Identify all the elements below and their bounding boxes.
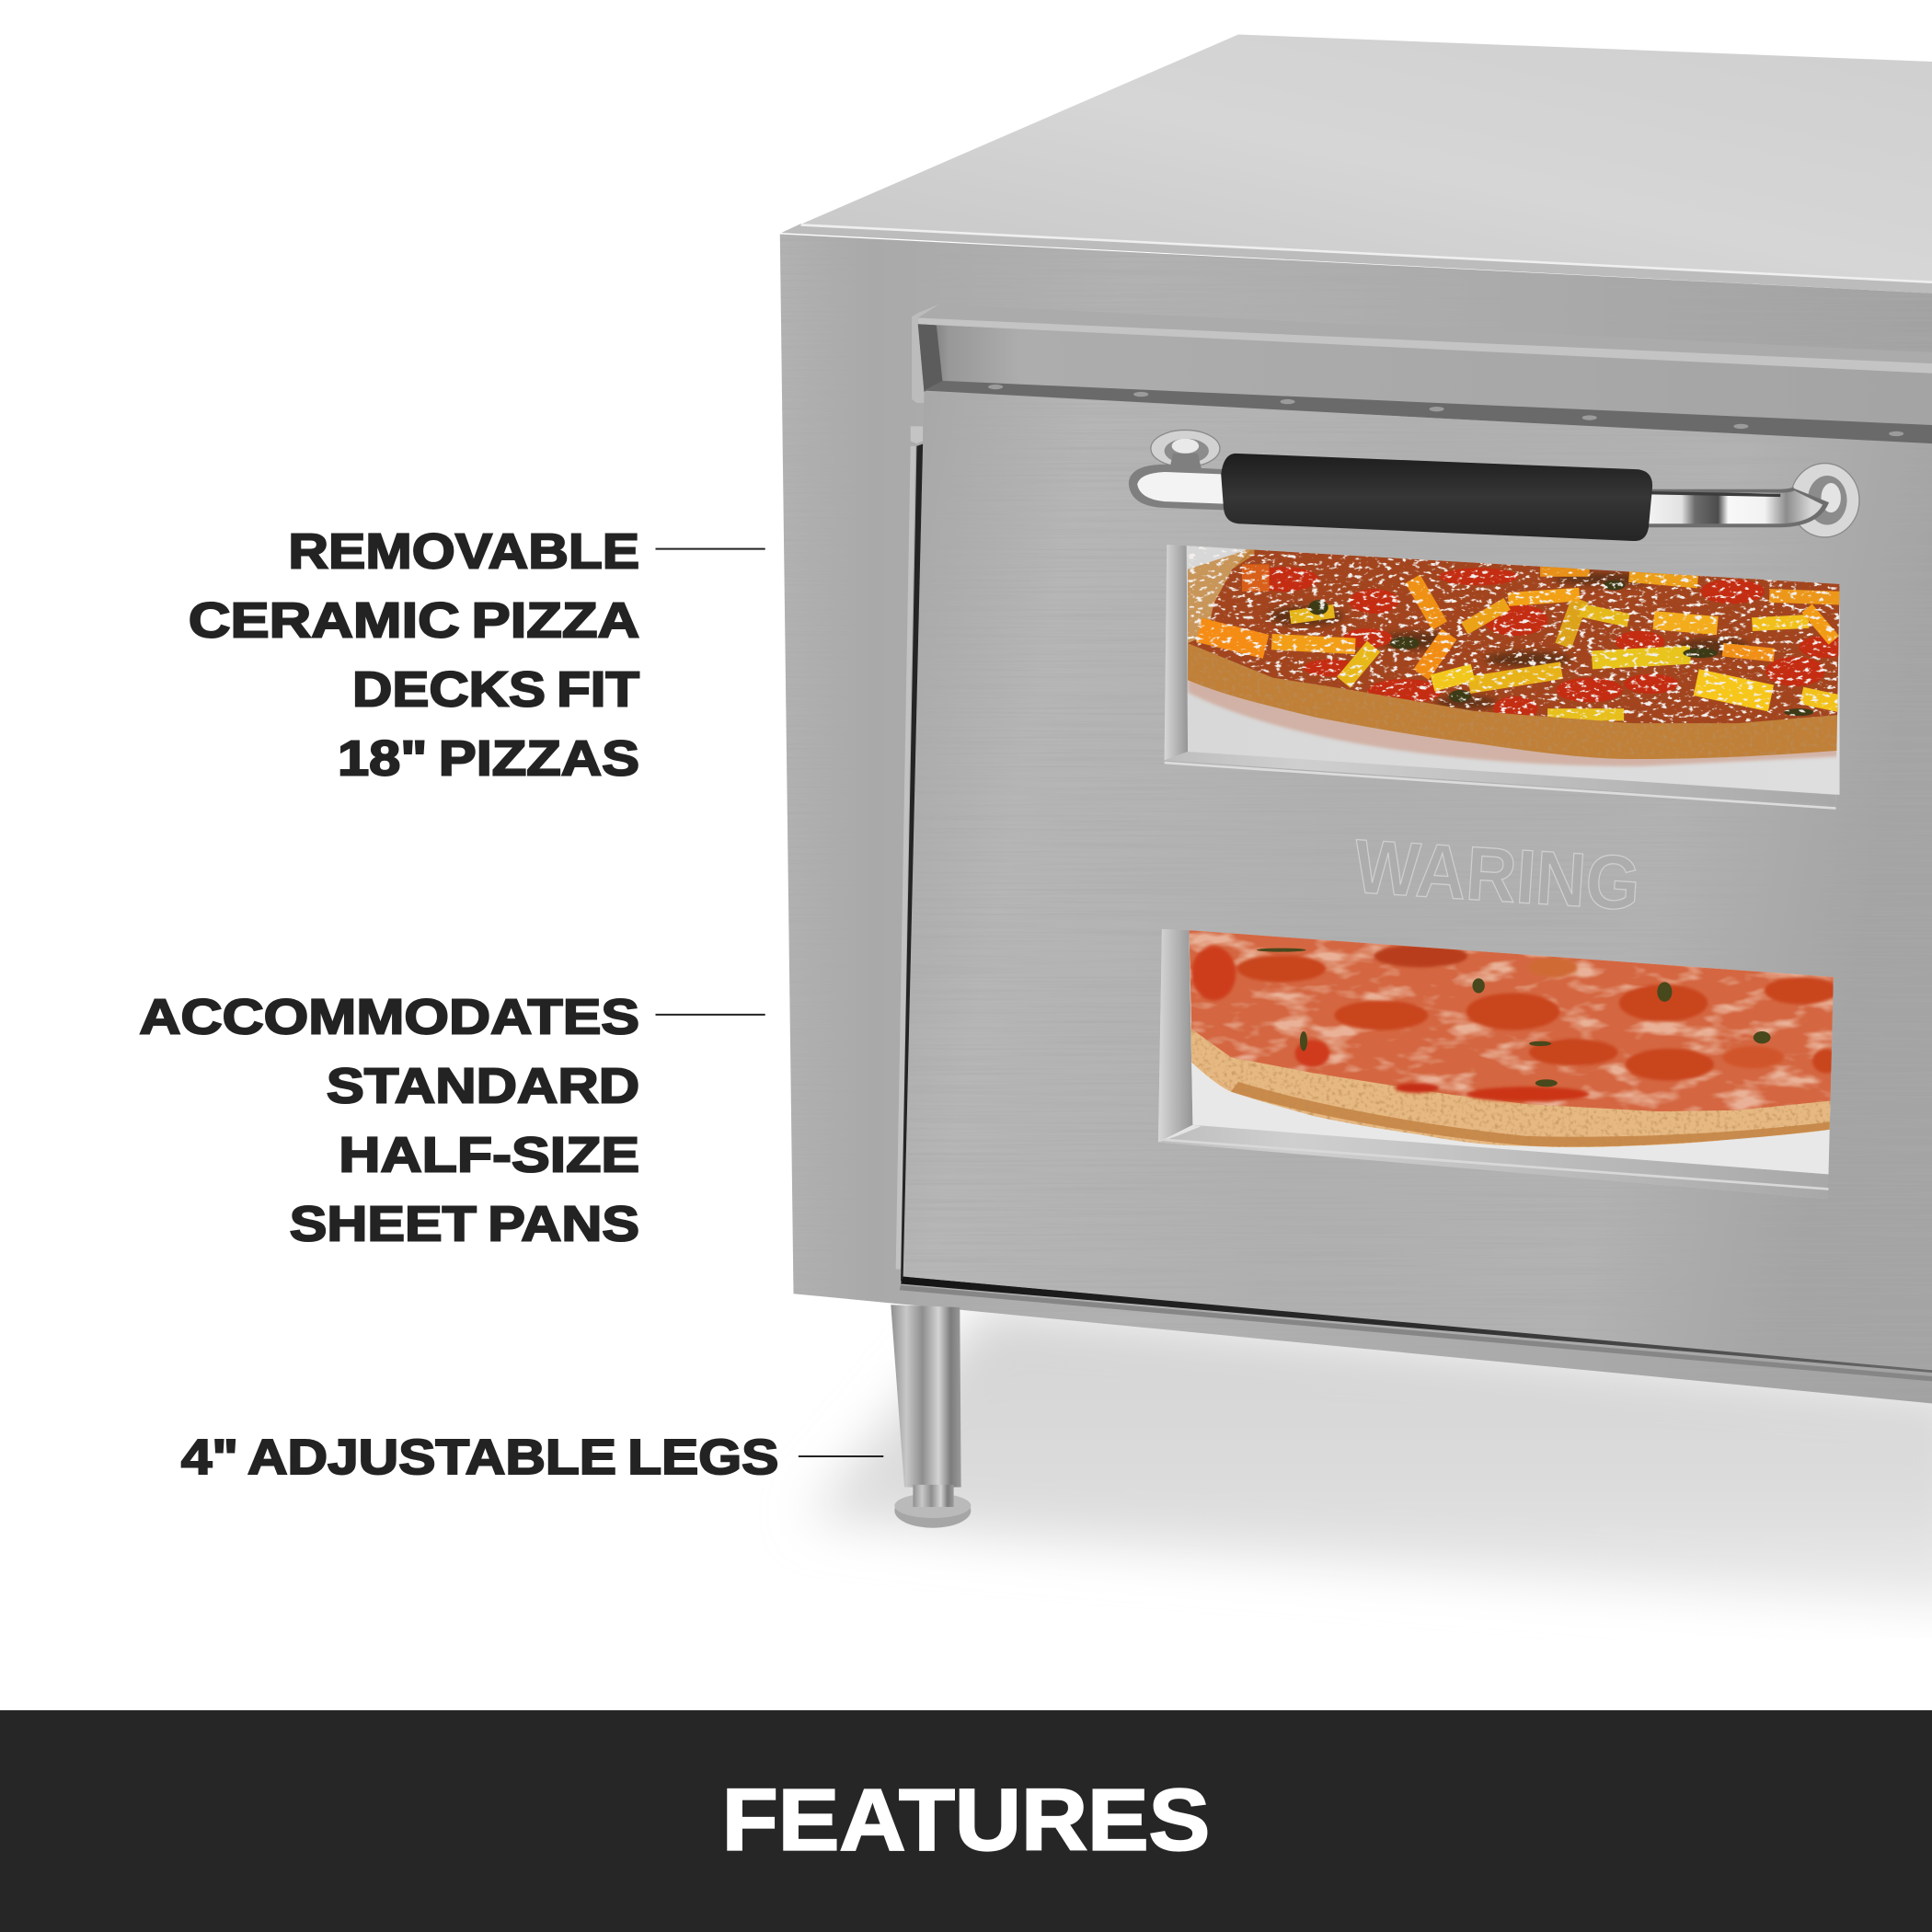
callout text: HALF-SIZE <box>339 1129 639 1183</box>
callout text: STANDARD <box>327 1060 639 1114</box>
right chrome tube <box>1641 495 1811 508</box>
oven door <box>903 392 1932 1370</box>
melted cheese <box>1189 924 1836 1111</box>
oven top surface <box>801 35 1932 281</box>
callout text: CERAMIC PIZZA <box>189 593 639 648</box>
left flange <box>1151 430 1220 467</box>
callout: half-size sheet pans <box>139 991 765 1252</box>
callout text: DECKS FIT <box>352 662 639 717</box>
peppers <box>1196 564 1845 720</box>
footer band <box>0 1710 1932 1932</box>
cherry tomatoes <box>1249 567 1848 720</box>
crust <box>1189 1017 1836 1147</box>
top front bevel <box>781 224 1932 293</box>
oven front frame <box>780 234 1932 1403</box>
herbs <box>1308 581 1813 716</box>
door top strip with screws <box>924 381 1932 444</box>
callout text: 4" ADJUSTABLE LEGS <box>181 1431 778 1485</box>
cheese and sauce <box>1189 924 1836 1111</box>
callout text: REMOVABLE <box>288 524 639 579</box>
left chrome tube <box>1129 454 1227 510</box>
callout text: 18" PIZZAS <box>338 731 639 786</box>
window frame <box>1165 545 1840 806</box>
callout: removable ceramic pizza decks <box>189 524 765 786</box>
black grip <box>1221 454 1652 541</box>
recess above door <box>912 305 1932 426</box>
upper window with pizza <box>1165 542 1848 810</box>
callout line <box>655 1014 765 1016</box>
callout line <box>799 1455 883 1457</box>
callout text <box>189 524 639 786</box>
pizza oven <box>780 35 1932 1528</box>
floor shadow <box>807 1306 1932 1608</box>
lower window with pizza <box>1158 924 1840 1199</box>
grated cheese <box>1188 542 1844 727</box>
WARING logo: WARING <box>1351 823 1642 926</box>
pepperoni <box>1191 945 1840 1101</box>
oven leg <box>891 1305 971 1528</box>
crust <box>1188 542 1841 759</box>
sauce and toppings base <box>1188 542 1841 723</box>
callout text: SHEET PANS <box>290 1198 639 1252</box>
callout line <box>655 548 765 550</box>
callout text: ACCOMMODATES <box>139 991 639 1045</box>
pizza shadow on pan <box>1188 665 1838 766</box>
callout text <box>139 991 639 1252</box>
door gap and hinge <box>896 426 1932 1381</box>
right flange <box>1790 464 1859 537</box>
dark sauce patches <box>1269 573 1750 708</box>
footer heading: FEATURES <box>722 1771 1210 1869</box>
window frame <box>1158 929 1834 1199</box>
herbs <box>1257 949 1771 1087</box>
door handle <box>1129 430 1859 541</box>
